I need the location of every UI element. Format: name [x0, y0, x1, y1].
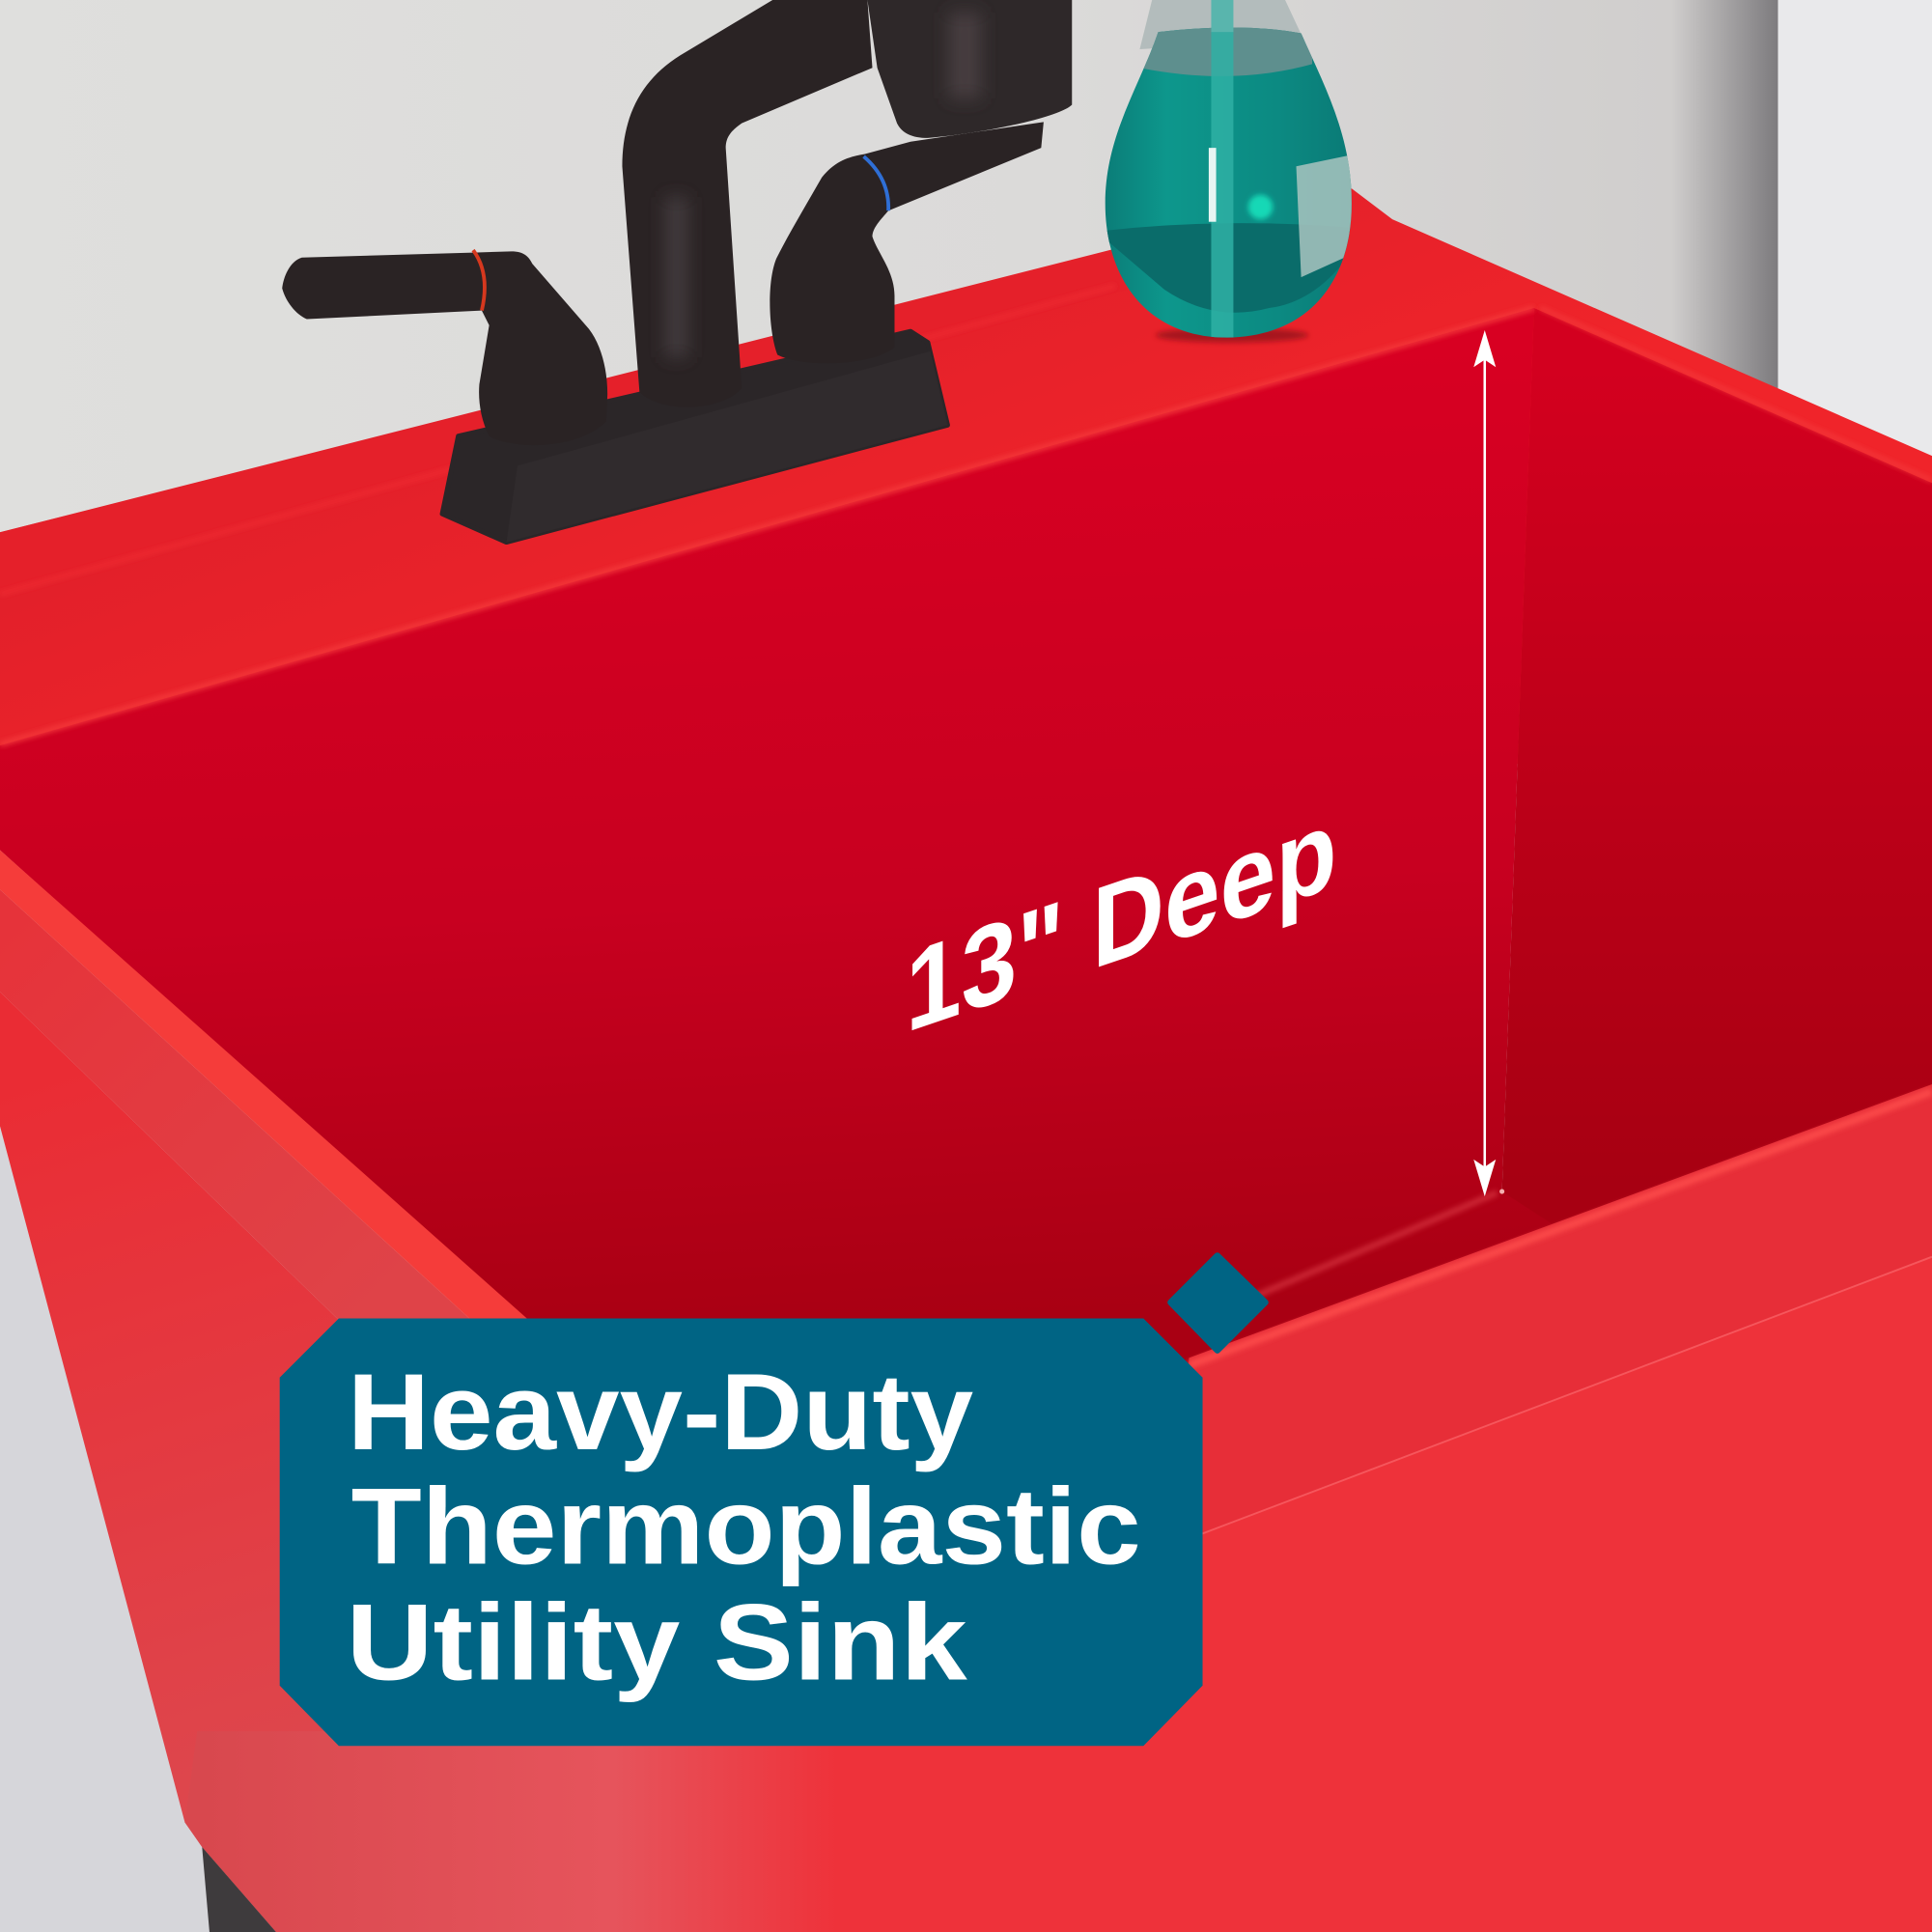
sink leg — [202, 1847, 276, 1932]
soap bottle — [1097, 0, 1356, 345]
dimension arrow — [1473, 330, 1496, 1196]
sink front face — [740, 1257, 1932, 1932]
basin floor ridge — [1232, 1189, 1504, 1306]
callout heading: Utility Sink — [347, 1581, 967, 1702]
callout panel — [280, 1318, 1203, 1746]
faucet — [282, 0, 1072, 543]
callout heading: Heavy-Duty — [348, 1351, 973, 1472]
callout heading — [347, 1351, 1141, 1702]
lip highlight — [1189, 1092, 1932, 1365]
sink interior back wall — [0, 308, 1602, 1374]
callout heading: Thermoplastic — [351, 1465, 1141, 1586]
sprayer head — [867, 0, 1072, 138]
callout — [280, 1255, 1266, 1746]
front seam line — [1201, 1257, 1932, 1534]
spout highlight — [665, 197, 687, 357]
left lip and outer face — [0, 851, 862, 1932]
front right lip — [1177, 1084, 1932, 1540]
sprayer highlight — [949, 13, 981, 98]
sink interior right wall — [1502, 308, 1932, 1232]
callout pointer diamond — [1170, 1255, 1266, 1351]
faucet spout — [622, 0, 873, 407]
red ring — [473, 250, 485, 311]
blue ring — [864, 156, 888, 210]
depth label: 13" Deep — [906, 783, 1337, 1057]
right handle — [770, 122, 1044, 363]
rim edge highlights — [0, 308, 1932, 744]
left handle — [282, 251, 607, 445]
sink rim top surface — [0, 188, 1932, 764]
faucet base — [442, 331, 947, 543]
